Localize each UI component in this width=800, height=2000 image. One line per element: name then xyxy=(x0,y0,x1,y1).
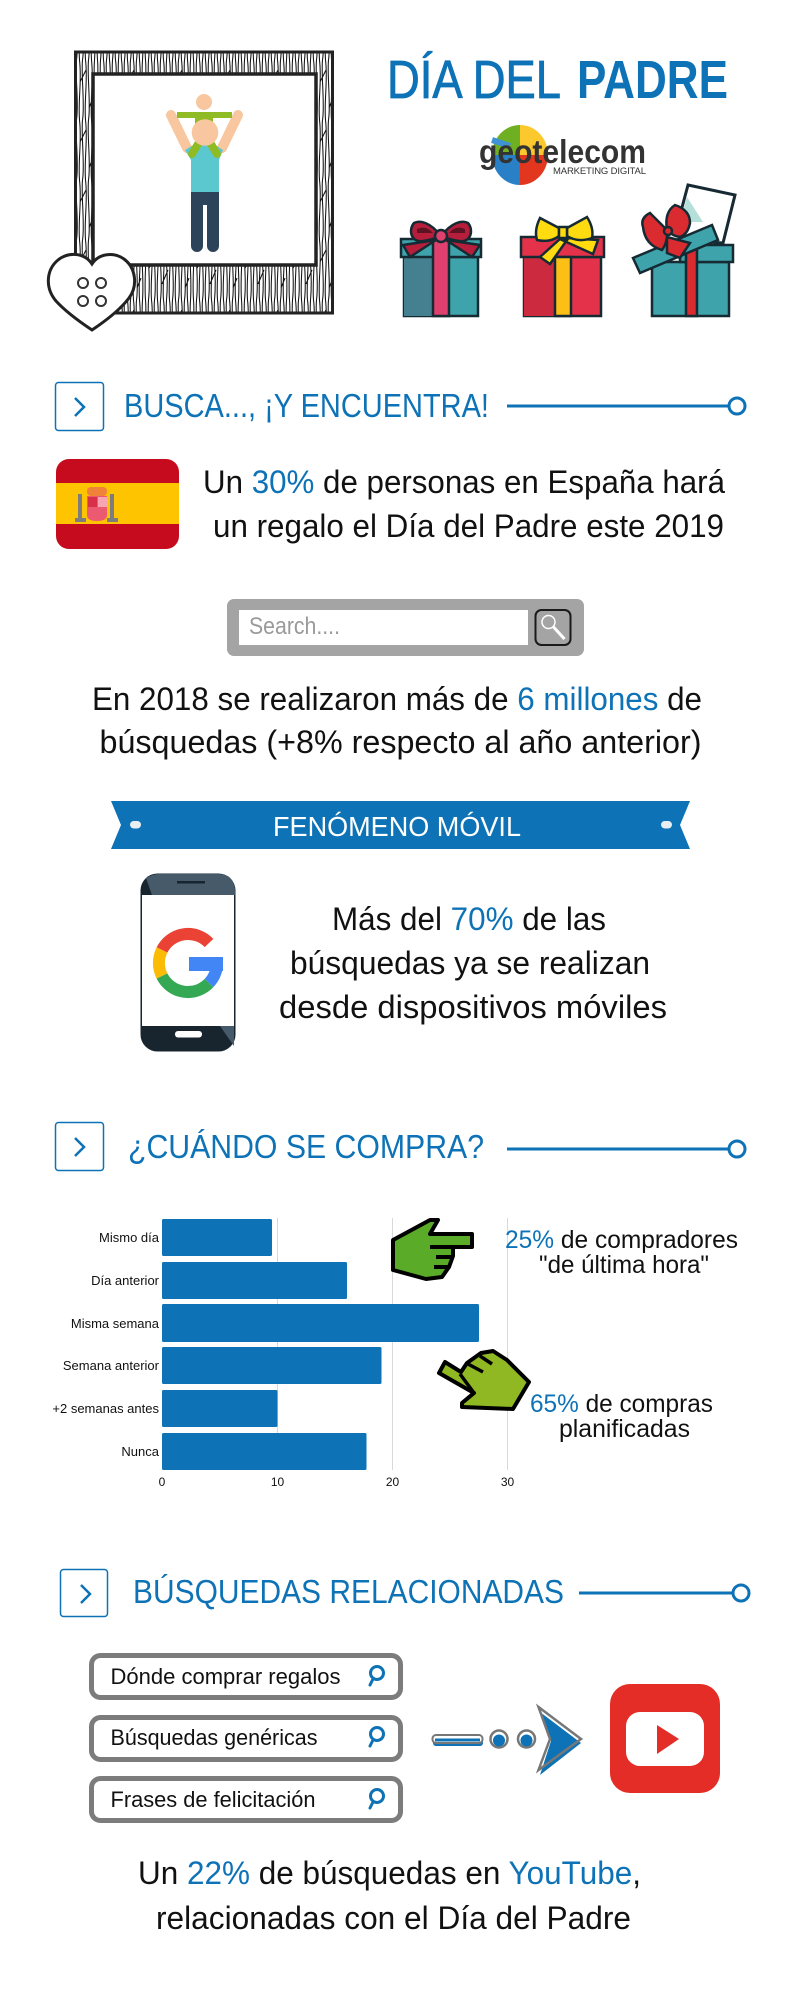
ribbon banner: fenomeno movil: FENÓMENO MÓVIL xyxy=(273,811,521,842)
text: 6 million searches xyxy=(92,681,702,760)
search chip: busquedas genericas xyxy=(92,1718,400,1760)
callout: planned purchases xyxy=(530,1390,713,1443)
chevron box xyxy=(60,1570,108,1616)
title xyxy=(387,50,728,110)
bar chart: when people buy xyxy=(52,1218,514,1489)
text: 70% mobile: búsquedas ya se realizan xyxy=(290,945,650,981)
bars xyxy=(162,1219,479,1470)
section header: cuando se compra xyxy=(56,1122,745,1170)
ribbon banner: fenomeno movil xyxy=(111,801,690,849)
value axis: 0 xyxy=(159,1475,166,1489)
connector line xyxy=(507,398,745,414)
text: 70% mobile xyxy=(279,901,667,1025)
phone with google logo xyxy=(140,874,236,1052)
category labels: Nunca xyxy=(121,1444,160,1459)
category labels xyxy=(52,1230,160,1459)
search bar: Search.... xyxy=(249,613,340,640)
arrow to youtube xyxy=(432,1707,581,1775)
category labels: Día anterior xyxy=(91,1273,160,1288)
value axis: 20 xyxy=(386,1475,399,1489)
callout: last minute buyers: 25% de compradores xyxy=(505,1226,738,1254)
google g xyxy=(159,934,223,992)
magnifier button xyxy=(536,610,570,645)
value axis xyxy=(159,1475,514,1489)
search chip: frases de felicitacion xyxy=(92,1778,400,1820)
category labels: Misma semana xyxy=(71,1316,160,1331)
search chip: frases de felicitacion: Frases de felicitación xyxy=(110,1787,316,1812)
geotelecom logo: geotelecom xyxy=(479,133,646,170)
photo frame with father and child xyxy=(48,52,332,330)
category labels: Mismo día xyxy=(99,1230,160,1245)
gift: open teal box with tablet and red bow xyxy=(633,185,735,316)
category labels: +2 semanas antes xyxy=(52,1401,159,1416)
section header: busca: BUSCA..., ¡Y ENCUENTRA! xyxy=(124,387,489,424)
section header: cuando se compra: ¿CUÁNDO SE COMPRA? xyxy=(128,1128,484,1165)
geotelecom logo xyxy=(479,125,646,185)
text: 22% on youtube: relacionadas con el Día del Padre xyxy=(156,1900,631,1936)
value axis: 30 xyxy=(501,1475,514,1489)
text: 22% on youtube: Un 22% de búsquedas en YouTube, xyxy=(138,1855,641,1891)
connector line xyxy=(579,1585,749,1601)
icon: hand pointing right xyxy=(393,1220,472,1279)
search bar xyxy=(227,599,584,656)
gift: teal box with crimson bow xyxy=(401,222,481,316)
title: PADRE xyxy=(577,50,728,110)
text: 70% mobile: desde dispositivos móviles xyxy=(279,989,667,1025)
category labels: Semana anterior xyxy=(63,1358,160,1373)
search chip: donde comprar regalos xyxy=(92,1656,400,1698)
text: 22% on youtube xyxy=(138,1855,641,1936)
text: 70% mobile: Más del 70% de las xyxy=(332,901,606,937)
section header: busca xyxy=(56,382,745,430)
geotelecom logo: MARKETING DIGITAL xyxy=(553,166,646,177)
chevron box xyxy=(56,1122,104,1170)
search chip: busquedas genericas: Búsquedas genéricas xyxy=(110,1725,318,1750)
callout: last minute buyers: "de última hora" xyxy=(539,1251,709,1279)
callout: planned purchases: 65% de compras xyxy=(530,1390,713,1418)
search chip: donde comprar regalos: Dónde comprar regalos xyxy=(110,1664,340,1689)
section header: busquedas relacionadas: BÚSQUEDAS RELACIONADAS xyxy=(133,1573,564,1610)
chevron box xyxy=(56,382,104,430)
callout: planned purchases: planificadas xyxy=(559,1415,690,1443)
icon: hand pointing up-left xyxy=(439,1351,529,1409)
wooden frame xyxy=(76,52,332,313)
heart button xyxy=(48,254,135,330)
text: 30% of people xyxy=(203,464,725,544)
connector line xyxy=(507,1141,745,1157)
value axis: 10 xyxy=(271,1475,284,1489)
title: DÍA DEL xyxy=(387,50,561,110)
spanish flag xyxy=(56,459,179,549)
father carrying child xyxy=(171,94,238,252)
callout: last minute buyers xyxy=(505,1226,738,1279)
section header: busquedas relacionadas xyxy=(60,1570,749,1616)
gift: red box with yellow bow xyxy=(521,217,604,316)
text: 6 million searches: búsquedas (+8% respecto al año anterior) xyxy=(100,724,702,760)
text: 6 million searches: En 2018 se realizaron más de 6 millones de xyxy=(92,681,702,717)
icon: youtube xyxy=(610,1684,720,1793)
text: 30% of people: Un 30% de personas en España hará xyxy=(203,464,725,500)
text: 30% of people: un regalo el Día del Padre este 2019 xyxy=(213,508,724,544)
